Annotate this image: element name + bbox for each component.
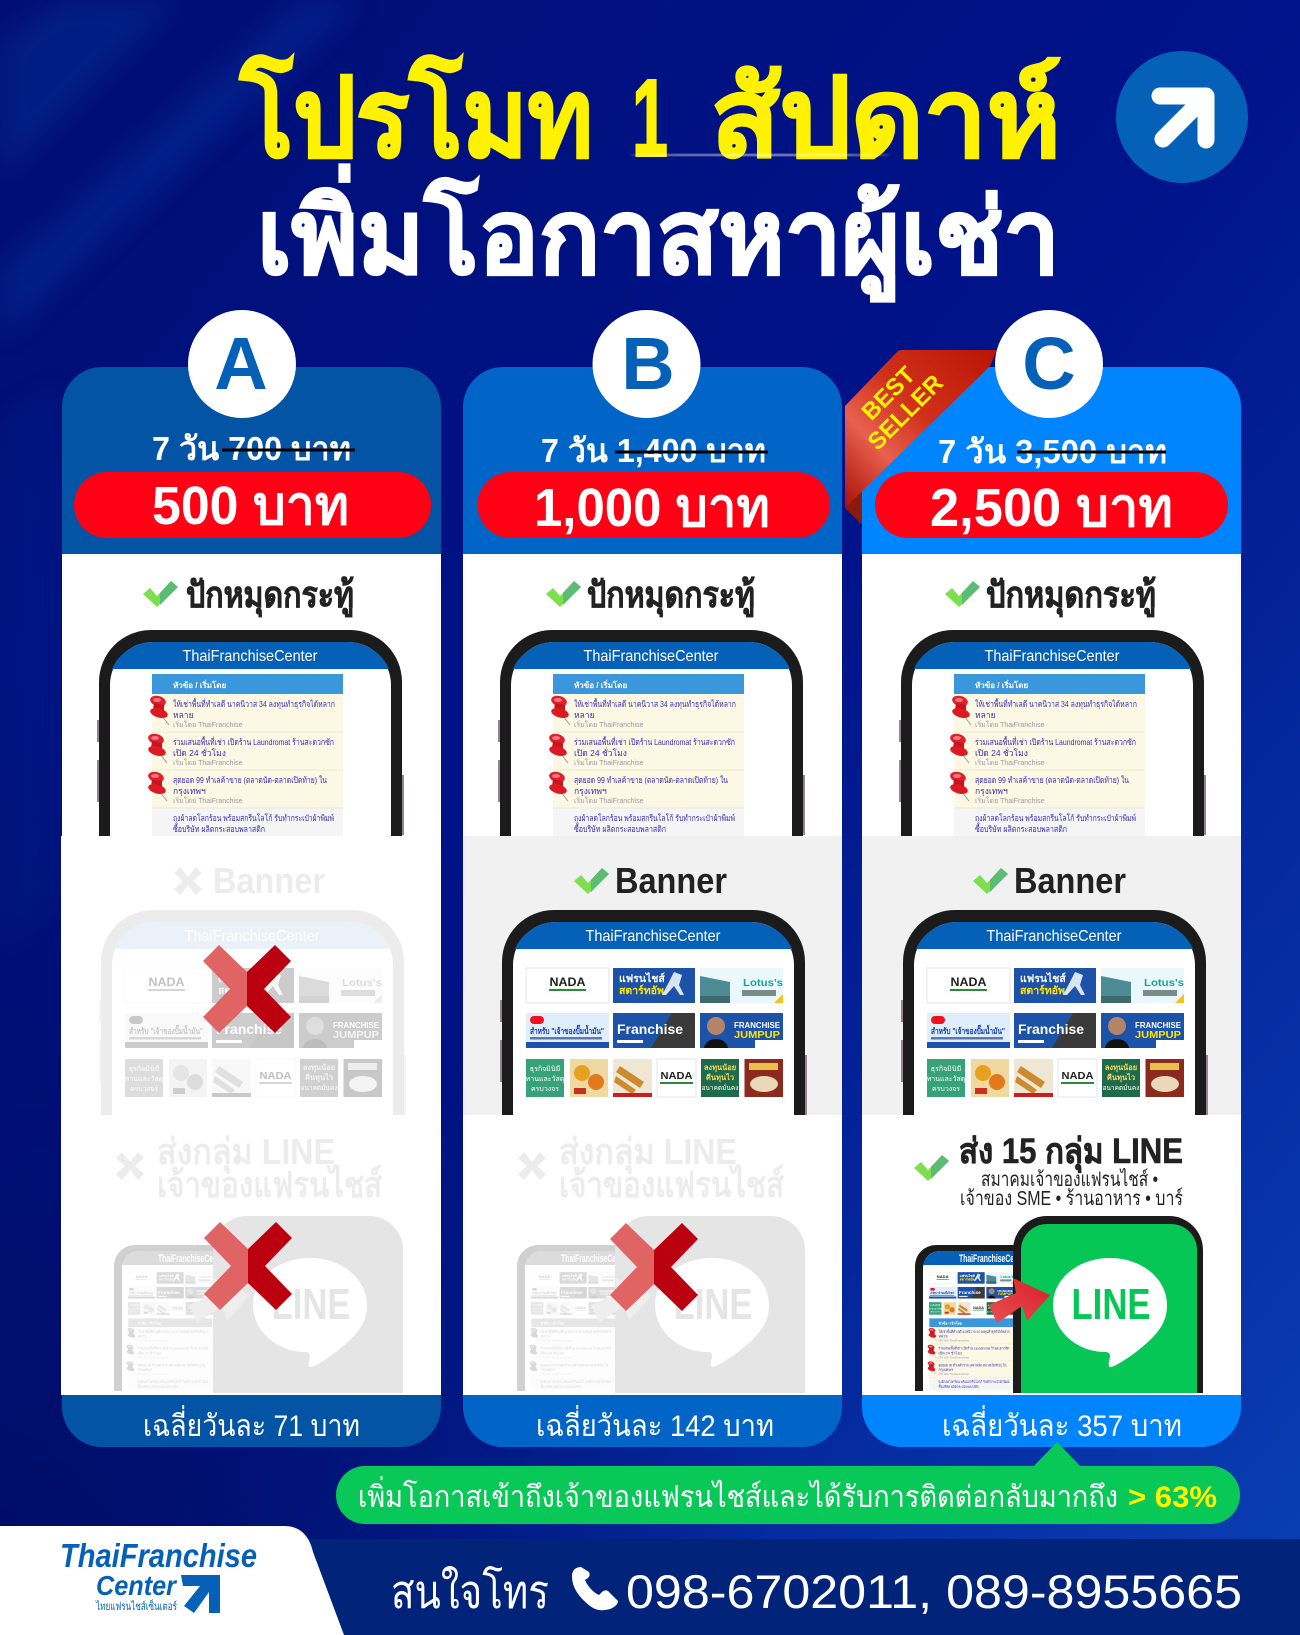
contact: สนใจโทร xyxy=(391,1565,549,1618)
badge: B: B xyxy=(621,322,675,405)
plan A footer xyxy=(62,1395,441,1447)
plan B price: 1,000 บาท xyxy=(534,478,770,538)
plan B row: banner xyxy=(463,836,842,1120)
badge: A xyxy=(188,310,296,418)
plan A row: LINE (not included) xyxy=(61,1115,441,1400)
plan C row: pinned post xyxy=(862,554,1241,840)
badge: A: A xyxy=(214,322,268,405)
plan C price: 2,500 บาท xyxy=(930,478,1173,538)
panel: plan C xyxy=(862,367,1241,1447)
plan A price: 500 บาท xyxy=(152,476,349,536)
plan B footer: เฉลี่ยวันละ 142 บาท xyxy=(536,1405,774,1443)
logo panel: ไทยแฟรนไชส์เซ็นเตอร์ xyxy=(95,1599,177,1613)
plan B price: 7 วัน 1,400 บาท xyxy=(541,432,766,469)
ribbon: best seller: BEST xyxy=(857,361,921,426)
ribbon: best seller: SELLER xyxy=(863,370,949,456)
plan B footer xyxy=(463,1395,842,1447)
plan A price xyxy=(74,430,431,538)
plan A row: banner (not included) xyxy=(61,836,441,1120)
icon: phone xyxy=(572,1567,618,1610)
plan C footer xyxy=(862,1395,1241,1447)
badge: B xyxy=(592,310,700,418)
contact: 098-6702011, 089-8955665 xyxy=(626,1565,1242,1618)
title: 1 xyxy=(632,57,668,180)
callout: 63% xyxy=(336,1442,1240,1524)
plan C row: LINE groups xyxy=(862,1115,1241,1400)
plan C row: banner xyxy=(862,836,1241,1120)
plan A row: pinned post: ปักหมุดกระทู้ xyxy=(186,574,354,618)
plan C header xyxy=(862,367,1241,554)
panel: plan B xyxy=(463,367,842,1447)
plan B row: banner: Banner xyxy=(615,860,727,901)
title: โปรโมท xyxy=(239,55,593,180)
plan A row: LINE (not included): ส่งกลุ่ม LINE xyxy=(157,1131,335,1175)
plan A footer: เฉลี่ยวันละ 71 บาท xyxy=(143,1405,360,1443)
plan B header xyxy=(463,367,842,554)
plan B row: pinned post: ปักหมุดกระทู้ xyxy=(587,574,755,618)
plan A header xyxy=(62,367,441,554)
logo panel: Center xyxy=(96,1570,178,1601)
icon: growth arrow circle xyxy=(1116,51,1248,183)
ribbon: best seller xyxy=(845,350,997,525)
badge: C xyxy=(995,310,1103,418)
plan C row: LINE groups: เจ้าของ SME • ร้านอาหาร • บาร์ xyxy=(960,1187,1183,1210)
title xyxy=(239,55,1061,302)
callout: 63%: > 63% xyxy=(1128,1481,1217,1514)
plan B row: LINE (not included): เจ้าของแฟรนไชส์ xyxy=(559,1163,784,1205)
plan C row: pinned post: ปักหมุดกระทู้ xyxy=(986,574,1156,618)
plan B row: pinned post xyxy=(463,554,842,840)
plan A row: pinned post xyxy=(62,554,441,840)
plan A row: LINE (not included): เจ้าของแฟรนไชส์ xyxy=(157,1163,382,1205)
plan C footer: เฉลี่ยวันละ 357 บาท xyxy=(942,1405,1182,1443)
panel: plan A xyxy=(61,367,441,1447)
footer bar xyxy=(0,1539,1300,1635)
plan C price: 7 วัน 3,500 บาท xyxy=(938,433,1167,470)
plan C row: LINE groups: สมาคมเจ้าของแฟรนไชส์ • xyxy=(981,1168,1158,1191)
plan A row: banner (not included): Banner xyxy=(213,860,325,901)
callout: 63%: เพิ่มโอกาสเข้าถึงเจ้าของแฟรนไชส์และได้รับการติดต่อกลับมากถึง xyxy=(358,1476,1118,1514)
plan C row: LINE groups: ส่ง 15 กลุ่ม LINE xyxy=(959,1132,1183,1173)
title: สัปดาห์ xyxy=(711,57,1061,180)
plan B row: LINE (not included): ส่งกลุ่ม LINE xyxy=(559,1131,737,1175)
plan C row: LINE groups: LINE xyxy=(1072,1280,1150,1329)
badge: C: C xyxy=(1022,322,1076,405)
title: เพิ่มโอกาสหาผู้เช่า xyxy=(257,164,1060,302)
plan B price xyxy=(478,432,830,538)
contact xyxy=(391,1565,1242,1618)
plan B row: LINE (not included) xyxy=(463,1115,842,1400)
logo panel: ThaiFranchise xyxy=(60,1537,257,1574)
logo panel xyxy=(0,1526,344,1635)
plan A price: 7 วัน 700 บาท xyxy=(152,430,351,467)
plan C row: banner: Banner xyxy=(1014,860,1126,901)
plan C price xyxy=(875,433,1228,538)
